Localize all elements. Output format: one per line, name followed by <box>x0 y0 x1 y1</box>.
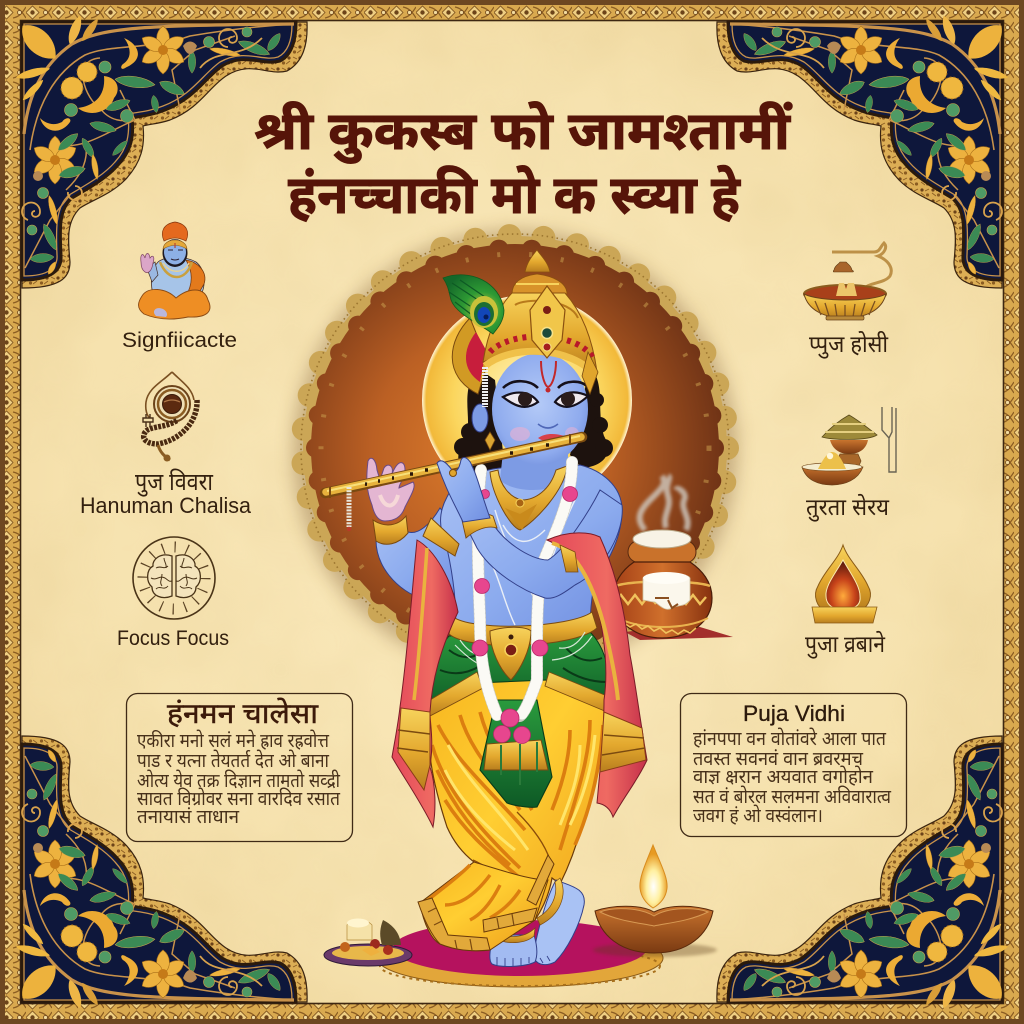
gold waist band on green <box>430 672 607 716</box>
crown <box>452 250 598 407</box>
rug under feet <box>377 920 663 987</box>
earring <box>485 432 495 450</box>
arm band right <box>560 545 578 572</box>
Krishna figure <box>325 250 647 951</box>
belt <box>449 612 597 645</box>
wrist bangle raised hand <box>373 516 408 544</box>
mandala backdrop <box>293 230 737 674</box>
text panel: right Puja Vidhi: जवग हं ओ वस्वंलान। <box>693 805 823 827</box>
eyes and brows <box>503 381 588 407</box>
diya oil lamp <box>593 845 717 957</box>
label: Hanuman Chalisa <box>80 468 252 518</box>
right icon: stacked vessel, bowl and fork <box>802 407 896 485</box>
text panel: right Puja Vidhi <box>680 694 906 836</box>
label: Significance: Signfiicacte <box>122 328 237 352</box>
offering plate <box>324 918 412 966</box>
text panel: right Puja Vidhi: Puja Vidhi <box>743 701 845 726</box>
corner ornament: top right <box>717 14 1010 288</box>
peacock feather <box>443 275 504 334</box>
text panel: left Hanuman Chalisa <box>126 694 352 842</box>
garland flowers <box>472 486 578 744</box>
neck <box>500 452 568 490</box>
right icon: temple lamp flame <box>812 545 877 623</box>
text panel: left Hanuman Chalisa: तनायासं ताधान <box>137 807 239 828</box>
right icon: offering bowl with serpent spoon <box>804 243 891 320</box>
text panel: right Puja Vidhi: हांनपपा वन वोतांवरे आला पात <box>693 727 887 750</box>
corner ornament: bottom left <box>14 736 307 1010</box>
raised hand <box>367 458 414 521</box>
dhoti yellow lower <box>420 675 607 951</box>
hair behind head <box>454 366 613 478</box>
feet and hem over rug <box>418 855 584 966</box>
dupatta right <box>547 533 647 817</box>
green dhoti top <box>430 632 609 712</box>
title: श्री कुकस्ब फो जामश्तामीं <box>254 101 792 164</box>
flute <box>325 434 582 531</box>
tilak <box>541 361 556 387</box>
pot of butter with steam <box>613 476 733 640</box>
halo <box>422 295 632 505</box>
arm band left <box>423 518 459 556</box>
garland <box>478 462 572 716</box>
torso <box>441 465 622 632</box>
raised arm <box>376 508 462 600</box>
text panel: left Hanuman Chalisa: ओत्य येव तक्र दिज्ञान तामतो सव्द्री <box>137 769 341 792</box>
left icon: brain in radiating circle <box>133 537 215 619</box>
gold necklace <box>490 466 567 530</box>
text panel: right Puja Vidhi: सत वं बोरल सलमना अविवारात्व <box>693 786 891 808</box>
label: Hanuman Chalisa: पुज विवरा <box>135 468 214 497</box>
text panel: left Hanuman Chalisa: एकीरा मनो सलं मने ह्राव रह्रवोत्त <box>137 729 330 752</box>
flute hand <box>437 458 490 522</box>
face and ear <box>472 404 488 432</box>
corner ornament: top left <box>14 14 307 288</box>
label: right 1: प्पुज होसी <box>809 331 889 359</box>
pearl strings <box>490 500 575 625</box>
text panel: left Hanuman Chalisa: हंनमन चालेसा <box>167 697 319 729</box>
nose and lips <box>538 424 558 428</box>
central green panel <box>480 700 552 807</box>
dupatta left <box>392 540 458 827</box>
left icon: seated sage <box>138 222 210 319</box>
wrist bangle left hand <box>462 514 497 538</box>
title <box>254 101 792 225</box>
text panel: left Hanuman Chalisa: पाड र यत्ना तेयतर्त देत ओ बाना <box>137 749 330 772</box>
title: हंनच्चाकी मो क स्व्या हे <box>288 165 741 225</box>
crossing arm <box>463 490 622 598</box>
label: right 3: पुजा व्रबाने <box>805 631 886 659</box>
dhoti folds <box>432 712 603 885</box>
corner ornament: bottom right <box>717 736 1010 1010</box>
label: Focus: Focus Focus <box>117 627 229 650</box>
text panel: right Puja Vidhi: तवस्त सवनवं वान ब्रवरमच <box>693 749 864 770</box>
label: right 2: तुरता सेरय <box>806 494 890 522</box>
left icon: prayer beads with medallion <box>143 372 197 462</box>
text panel: left Hanuman Chalisa: सावत विग्रोवर सना वारदिव रसात <box>137 788 341 810</box>
text panel: right Puja Vidhi: वाज्ञ क्षरान अयवात वगोहोन <box>693 766 873 788</box>
label: Hanuman Chalisa: Hanuman Chalisa <box>80 493 252 518</box>
belt medallion <box>490 627 531 680</box>
